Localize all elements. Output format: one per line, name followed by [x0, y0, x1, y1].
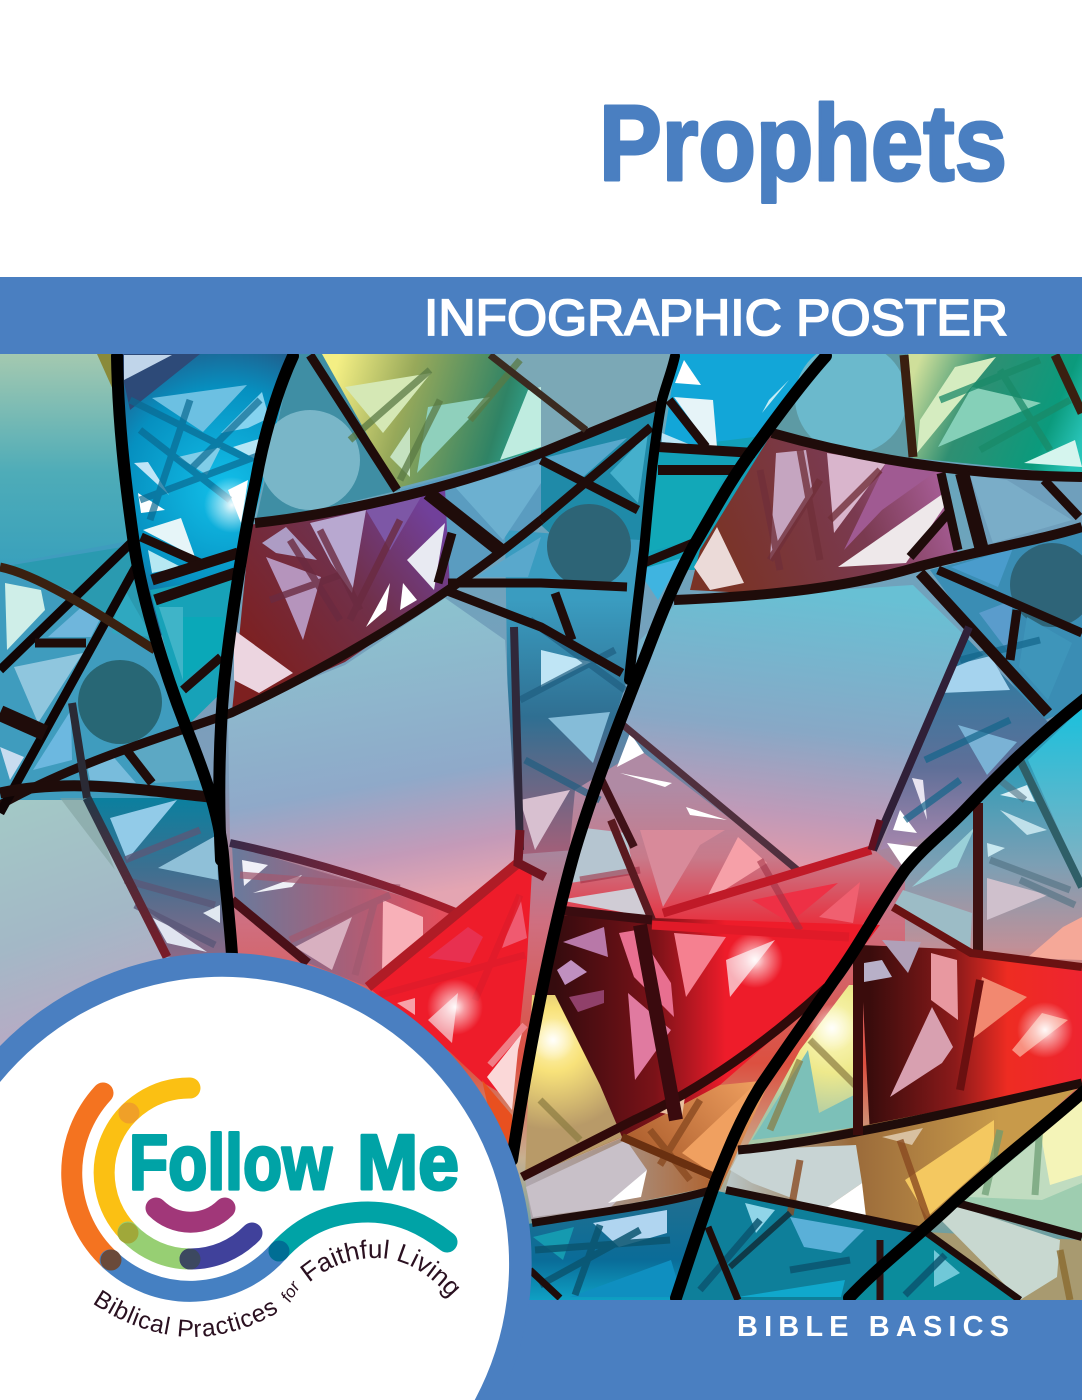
subtitle: INFOGRAPHIC POSTER: [424, 289, 1008, 346]
footer label: BIBLE BASICS: [737, 1311, 1009, 1343]
logo tagline: for: [281, 1280, 298, 1303]
logo arcs: [72, 1088, 447, 1291]
logo tagline: [94, 1240, 460, 1337]
light panes: upper left: [0, 355, 541, 1110]
logo wordmark second word: Me: [357, 1118, 459, 1206]
colour regions: [0, 354, 1082, 1300]
white circle: [0, 977, 509, 1400]
bottom blue band: [490, 1300, 1082, 1400]
base colour field: [0, 354, 1082, 1300]
logo tagline: Faithful Living: [300, 1240, 460, 1298]
logo tagline: Biblical Practices: [94, 1290, 278, 1337]
glow highlights: [204, 477, 1073, 1062]
logo: Follow Me: [61, 1078, 460, 1337]
title: Prophets: [599, 82, 1007, 203]
thick black leads: [117, 356, 1082, 1298]
white top panel: [0, 0, 1082, 277]
smooth cells: [0, 342, 1082, 1060]
logo overlap dots: [100, 1102, 290, 1270]
dark leading lines: [0, 355, 1082, 1300]
logo wordmark: Follow: [129, 1118, 332, 1206]
header band: [0, 277, 1082, 354]
stained glass artwork: [0, 342, 1082, 1300]
light panes: upper right: [520, 357, 1082, 870]
blue circle badge: [0, 953, 532, 1400]
light panes: red band and lower glass: [526, 827, 1082, 1300]
translucent inner struts: [125, 360, 1075, 1300]
